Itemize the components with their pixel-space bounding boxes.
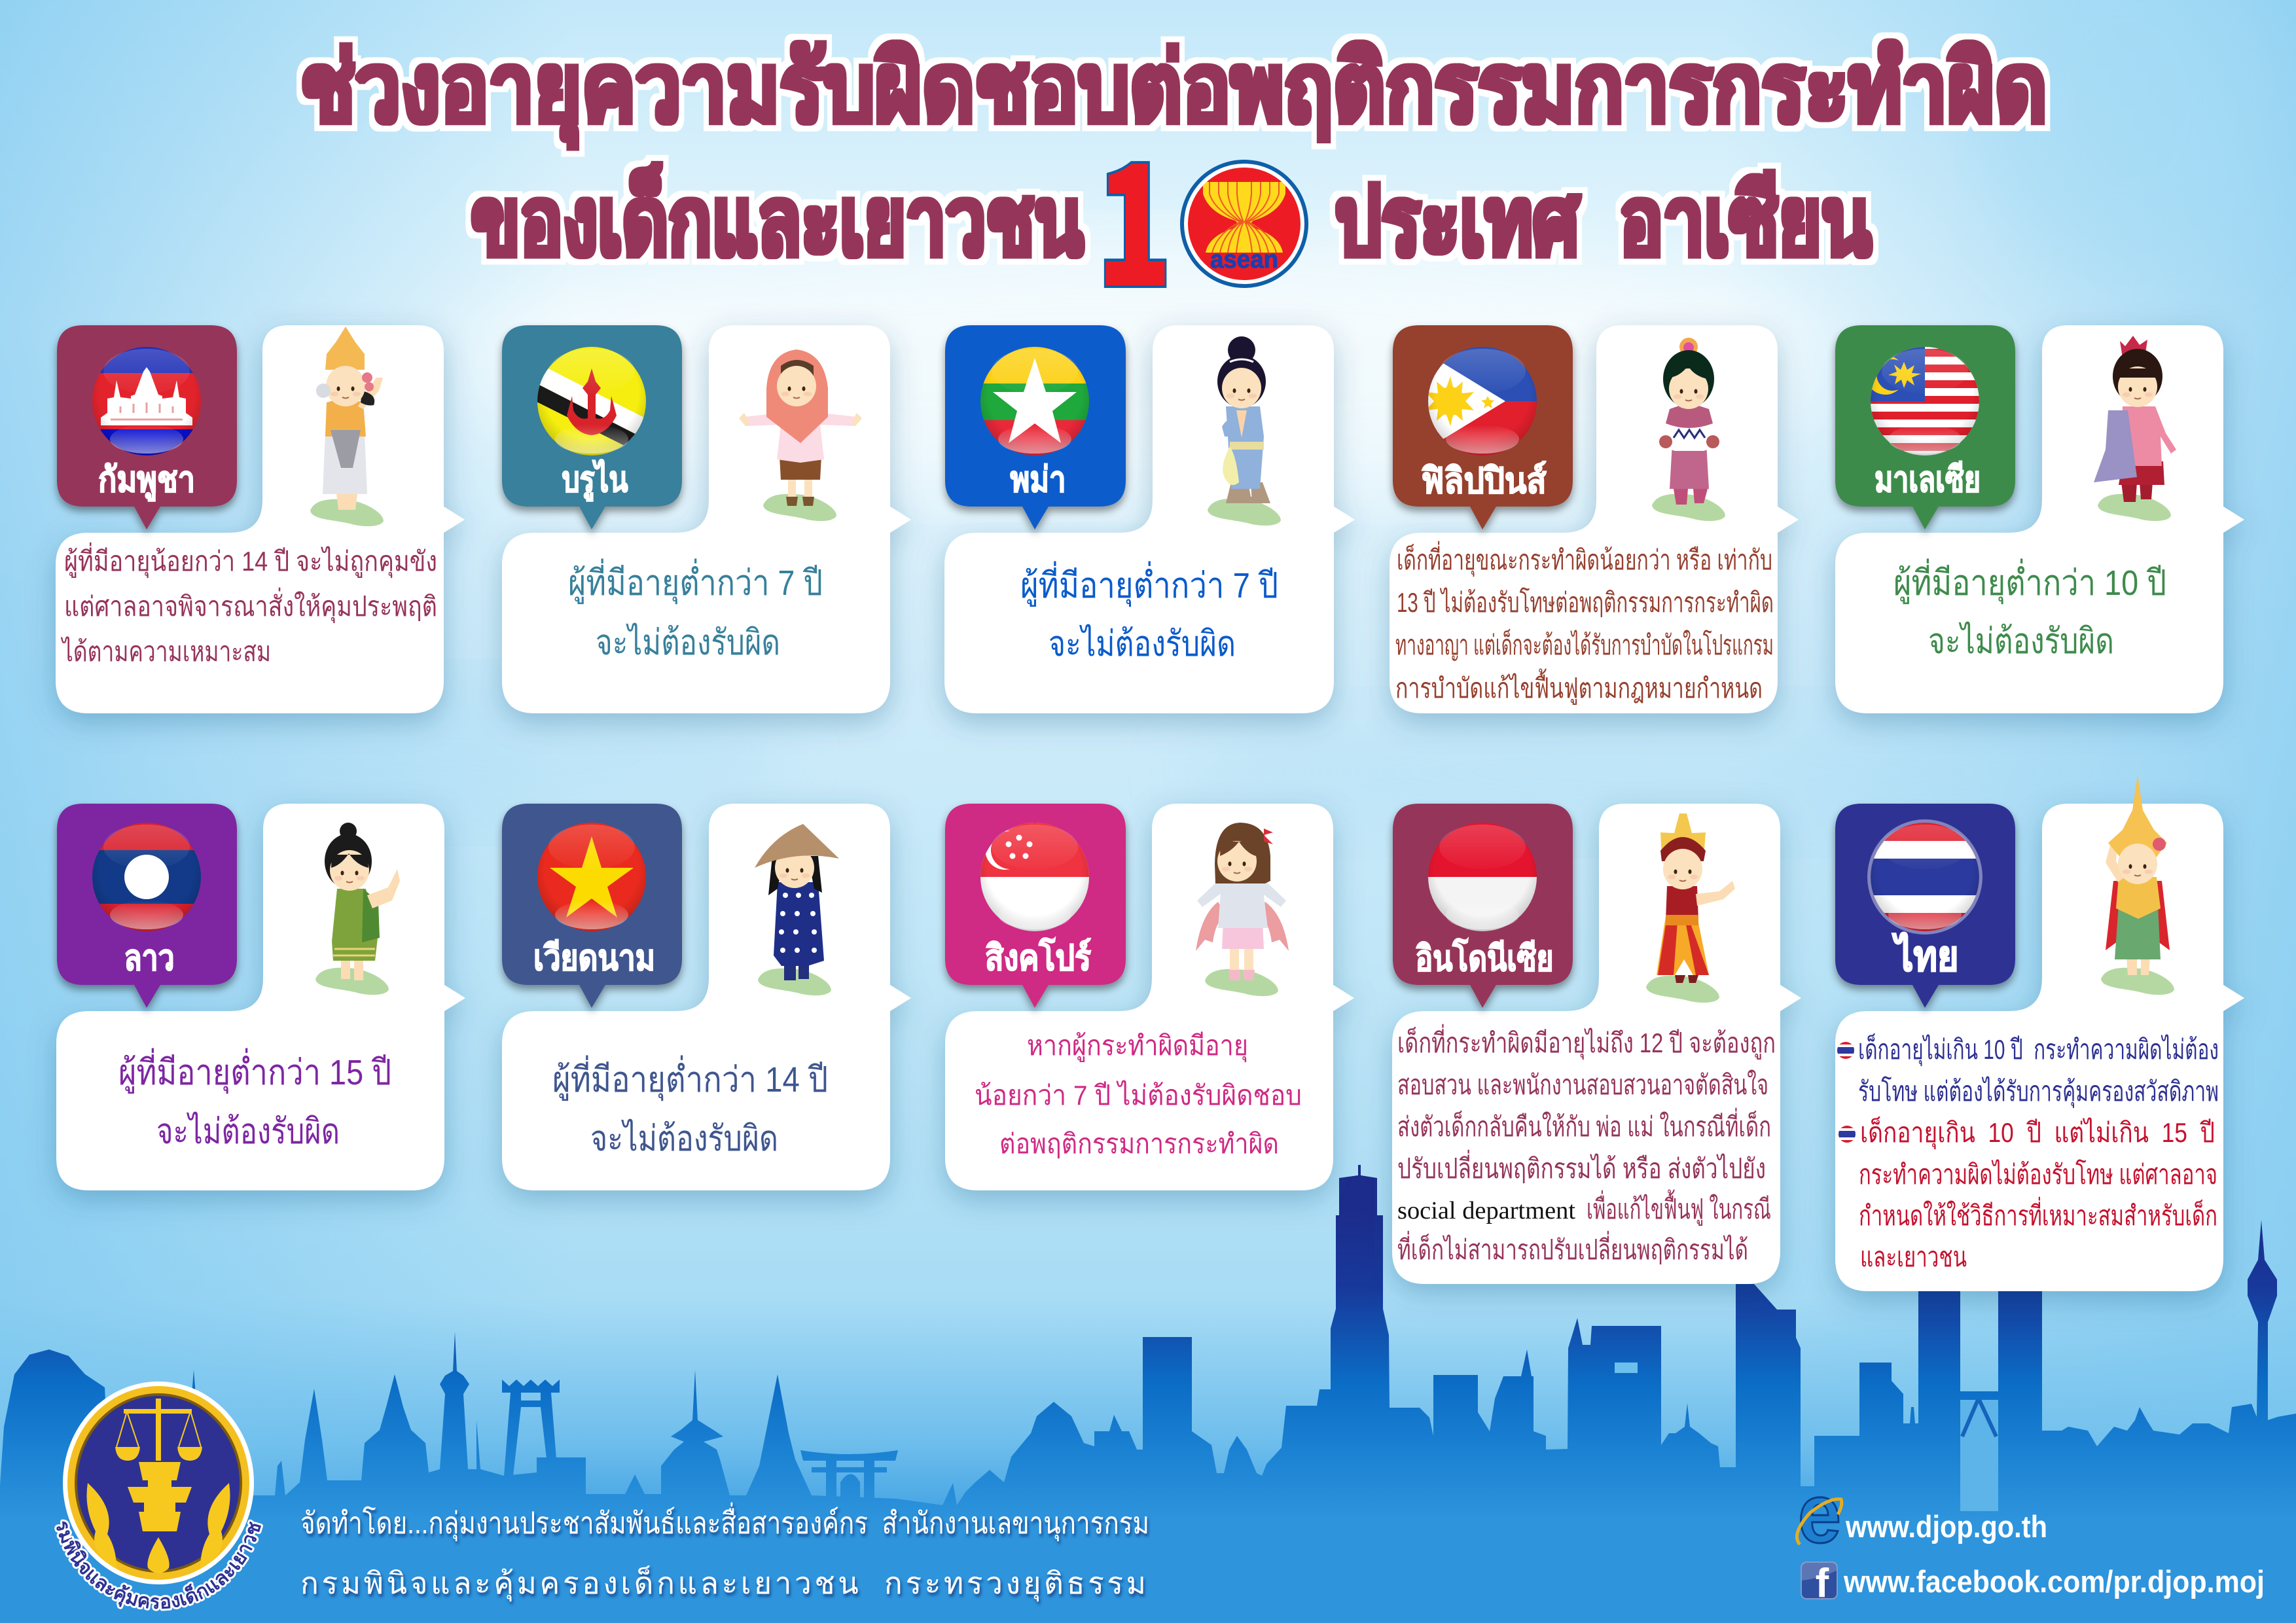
country label: ลาว [124, 938, 174, 978]
rule text: ปรับเปลี่ยนพฤติกรรมได้ หรือ ส่งตัวไปยัง [1397, 1150, 1766, 1184]
rule text: หากผู้กระทำผิดมีอายุ [1027, 1030, 1248, 1063]
title line 2 left: ของเด็กและเยาวชน [471, 163, 1083, 276]
panel: Philippines [1390, 325, 1799, 713]
department logo [54, 1382, 263, 1611]
rule text [975, 1030, 1302, 1159]
rule text [568, 558, 823, 662]
character: Thai child [2101, 775, 2174, 995]
rule text: ผู้ที่มีอายุต่ำกว่า 7 ปี [1020, 561, 1278, 607]
icon: facebook: f [1816, 1561, 1829, 1606]
character: Lao child [315, 823, 400, 995]
facebook url: www.facebook.com/pr.djop.moj [1843, 1564, 2265, 1599]
rule text [1020, 561, 1278, 664]
card shape [944, 325, 1355, 713]
panel: Myanmar [944, 325, 1355, 713]
rule text [1837, 1033, 2219, 1272]
icon: ASEAN emblem [1180, 160, 1308, 288]
rule text: สอบสวน และพนักงานสอบสวนอาจตัดสินใจ [1397, 1069, 1768, 1100]
icon: ASEAN emblem: asean [1210, 246, 1278, 274]
country label: ไทย [1892, 932, 1958, 980]
country label: พม่า [1011, 460, 1066, 499]
panel: Singapore [945, 804, 1354, 1190]
rule text [552, 1055, 828, 1158]
footer text [300, 1502, 1149, 1602]
character: Indonesian child [1646, 813, 1735, 1003]
character: Vietnamese child [755, 824, 839, 995]
rule text: 13 ปี ไม่ต้องรับโทษต่อพฤติกรรมการกระทำผิด [1397, 586, 1774, 618]
panel: Malaysia [1835, 325, 2244, 713]
rule text: ส่งตัวเด็กกลับคืนให้กับ พ่อ แม่ ในกรณีที่เด็ก [1397, 1108, 1771, 1142]
rule text: และเยาวชน [1860, 1241, 1967, 1272]
rule text: ผู้ที่มีอายุต่ำกว่า 10 ปี [1893, 558, 2166, 605]
rule text: จะไม่ต้องรับผิด [596, 622, 780, 662]
rule text [1397, 1024, 1776, 1265]
rule text: ผู้ที่มีอายุต่ำกว่า 15 ปี [118, 1048, 391, 1094]
flag: Vietnam [537, 823, 646, 931]
bullet: Thai flag 1 [1837, 1042, 1854, 1059]
country tile [1835, 804, 2015, 1008]
panel: Vietnam [502, 804, 911, 1190]
bullet: Thai flag 2 [1839, 1126, 1856, 1143]
card shape [1392, 804, 1801, 1284]
country tile [945, 325, 1126, 529]
rule text: น้อยกว่า 7 ปี ไม่ต้องรับผิดชอบ [975, 1080, 1302, 1111]
rule text: เด็กที่อายุขณะกระทำผิดน้อยกว่า หรือ เท่ากับ [1397, 541, 1772, 577]
card shape [945, 804, 1354, 1190]
panel: Laos [56, 804, 465, 1190]
character: Bruneian child [739, 349, 862, 521]
icon: browser: e [1798, 1467, 1841, 1561]
rule text [118, 1048, 391, 1151]
rule text: ผู้ที่มีอายุต่ำกว่า 14 ปี [552, 1055, 828, 1101]
country tile [57, 325, 237, 529]
country label: เวียดนาม [533, 938, 655, 978]
country label: ฟิลิปปินส์ [1422, 461, 1547, 501]
rule text [1395, 541, 1774, 705]
card shape [1390, 325, 1799, 713]
big numeral 1: 1 [1096, 91, 1172, 334]
character: Malaysian child [2094, 336, 2176, 521]
rule text: แต่ศาลอาจพิจารณาสั่งให้คุมประพฤติ [64, 588, 437, 624]
rule text: ทางอาญา แต่เด็กจะต้องได้รับการบำบัดในโปรแกรม [1395, 629, 1774, 661]
website url: www.djop.go.th [1845, 1509, 2047, 1544]
rule text: จะไม่ต้องรับผิด [590, 1118, 778, 1158]
card shape [502, 325, 911, 713]
rule text: ได้ตามความเหมาะสม [61, 636, 271, 667]
card shape [1835, 804, 2244, 1291]
country tile [945, 804, 1126, 1008]
flag: Laos [92, 823, 201, 931]
rule text: จะไม่ต้องรับผิด [1928, 621, 2114, 661]
icon: facebook [1801, 1561, 1837, 1606]
flag: Indonesia [1428, 823, 1537, 931]
character: Burmese child [1208, 336, 1281, 526]
rule text: เด็กที่กระทำผิดมีอายุไม่ถึง 12 ปี จะต้องถูก [1397, 1024, 1776, 1060]
credit line: จัดทำโดย...กลุ่มงานประชาสัมพันธ์และสื่อสารองค์กร สำนักงานเลขานุการกรม [300, 1502, 1149, 1542]
department line: กรมพินิจและคุ้มครองเด็กและเยาวชน กระทรวงยุติธรรม [300, 1565, 1146, 1602]
card shape [1835, 325, 2244, 713]
panel: Thailand [1835, 775, 2244, 1291]
country tile [502, 804, 682, 1008]
flag: Singapore [980, 823, 1089, 931]
country label: สิงคโปร์ [985, 937, 1091, 978]
flag: Thailand [1867, 819, 1982, 935]
country label: กัมพูชา [98, 460, 195, 501]
flag: Brunei [533, 347, 651, 459]
rule text: ผู้ที่มีอายุต่ำกว่า 7 ปี [568, 558, 823, 605]
country label: อินโดนีเซีย [1415, 938, 1554, 978]
rule text: เด็กอายุเกิน 10 ปี แต่ไม่เกิน 15 ปี [1860, 1116, 2215, 1150]
rule text: ผู้ที่มีอายุน้อยกว่า 14 ปี จะไม่ถูกคุมขัง [64, 543, 437, 579]
rule text: จะไม่ต้องรับผิด [156, 1111, 340, 1151]
flag: Malaysia [1866, 347, 1979, 455]
rule text: ต่อพฤติกรรมการกระทำผิด [999, 1128, 1279, 1159]
rule text [1893, 558, 2166, 661]
skyline silhouette [0, 1165, 2296, 1518]
title line 2 right: ประเทศ อาเซียน [1335, 166, 1871, 276]
panel: Cambodia [56, 325, 465, 713]
rule text: จะไม่ต้องรับผิด [1049, 624, 1236, 664]
rule text: การบำบัดแก้ไขฟื้นฟูตามกฎหมายกำหนด [1395, 668, 1763, 705]
country tile [502, 325, 682, 529]
title [296, 33, 2050, 288]
character: Singaporean child [1196, 823, 1289, 996]
flag: Philippines [1426, 347, 1537, 455]
country tile [57, 804, 237, 1008]
character: Cambodian child [310, 327, 384, 526]
country tile [1393, 325, 1573, 529]
card shape [56, 804, 465, 1190]
web links [1797, 1467, 2265, 1606]
rule text: social department [1397, 1197, 1575, 1224]
rule text: ที่เด็กไม่สามารถปรับเปลี่ยนพฤติกรรมได้ [1397, 1231, 1748, 1265]
panel: Brunei [502, 325, 911, 713]
card shape [502, 804, 911, 1190]
card shape [56, 325, 465, 713]
country tile [1835, 325, 2015, 529]
country label: มาเลเซีย [1874, 460, 1981, 499]
rule text [61, 543, 437, 667]
flag: Cambodia [92, 347, 201, 455]
country label: บรูไน [562, 459, 628, 501]
country tile [1393, 804, 1573, 1008]
rule text: เพื่อแก้ไขฟื้นฟู ในกรณี [1587, 1189, 1771, 1226]
character: Filipino child [1652, 338, 1725, 521]
flag: Myanmar [980, 347, 1089, 457]
panel: Indonesia [1392, 804, 1801, 1284]
